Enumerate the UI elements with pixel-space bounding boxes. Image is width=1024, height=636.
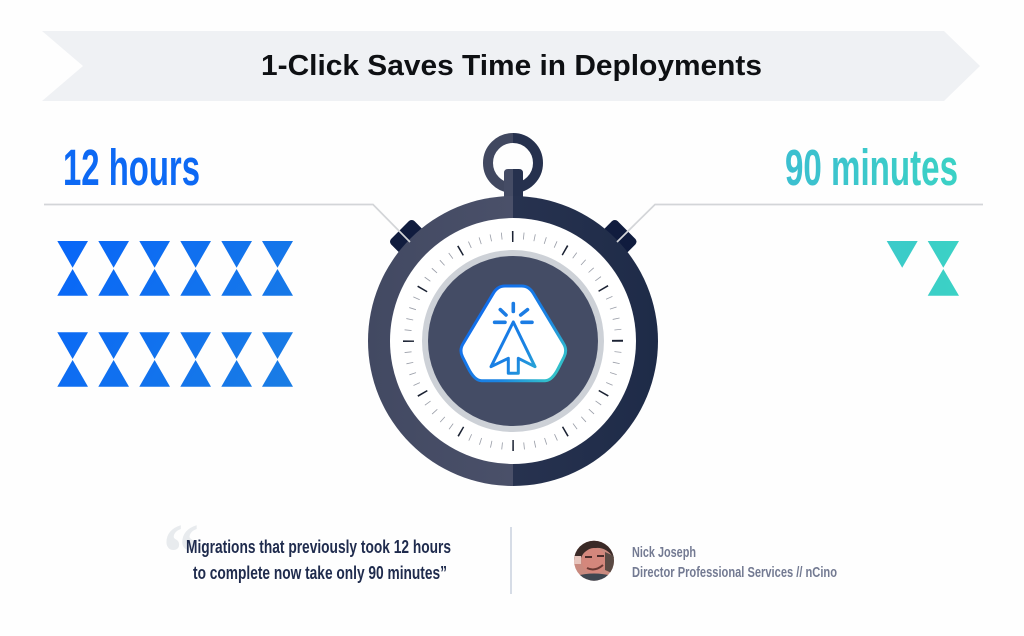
attribution name: Nick Joseph	[632, 545, 696, 561]
icon: click cursor badge	[461, 286, 566, 381]
left leader line	[44, 204, 410, 242]
hourglass row: ninety minutes	[887, 241, 959, 296]
stopwatch	[368, 138, 658, 486]
crown stem	[504, 169, 523, 205]
title: 1-Click Saves Time in Deployments	[261, 50, 762, 82]
right leader line	[617, 204, 983, 242]
right side button	[598, 218, 638, 259]
title banner	[42, 31, 980, 101]
avatar photo	[574, 540, 614, 582]
hourglass row 2: twelve hours	[57, 332, 293, 387]
attribution title: Director Professional Services // nCino	[632, 565, 837, 581]
left stat: 12 hours: 12 hours	[63, 139, 200, 196]
quote line 2: to complete now take only 90 minutes”	[193, 562, 447, 583]
quotation mark: “	[163, 506, 199, 598]
inner dark face	[428, 256, 598, 426]
arrow cursor	[491, 322, 535, 373]
vertical divider	[510, 527, 512, 594]
quote line 1: Migrations that previously took 12 hours	[186, 536, 451, 557]
watch body	[368, 196, 658, 486]
inner grey ring	[422, 250, 604, 432]
minute ticks	[408, 236, 618, 446]
left side button	[388, 218, 429, 259]
hourglass row 1: twelve hours	[57, 241, 293, 296]
hour ticks	[408, 236, 618, 446]
quote block	[163, 506, 451, 598]
top ring	[488, 138, 538, 188]
white dial	[390, 218, 636, 464]
click rays	[495, 304, 532, 322]
